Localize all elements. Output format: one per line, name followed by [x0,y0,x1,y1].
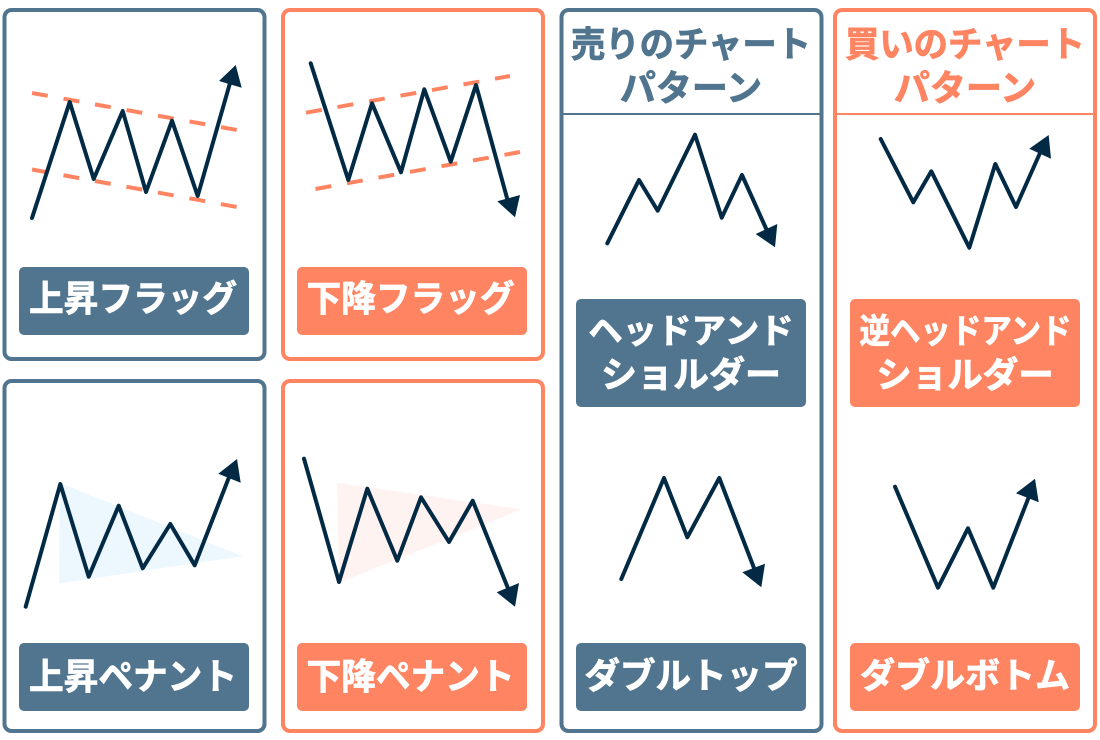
chart line: double bottom [895,479,1039,588]
label: double bottom [850,643,1080,711]
label: double bottom: ダブルボトム [860,656,1070,696]
heading: sell patterns: 売りのチャート [571,24,811,64]
label: falling pennant [297,643,527,711]
heading: buy patterns: パターン [894,68,1036,108]
pennant triangle [337,483,522,583]
label: rising pennant: 上昇ペナント [29,656,237,697]
label: head and shoulders: ショルダー [601,354,781,395]
label: head and shoulders [576,299,806,407]
label: falling pennant: 下降ペナント [306,656,514,697]
heading: sell patterns: パターン [620,68,762,108]
panel: rising pennant [4,381,264,731]
heading: buy patterns [845,24,1085,108]
panel: falling pennant [283,381,543,731]
label: inverse head and shoulders: 逆ヘッドアンド [860,313,1072,351]
flag channel lines [306,76,520,189]
label: double top: ダブルトップ [584,656,798,696]
chart line: rising pennant [26,459,241,607]
chart line: rising flag [32,65,242,218]
label: double top [576,643,806,711]
chart line: falling pennant [304,459,519,607]
panel: falling flag [283,10,543,359]
pennant triangle [59,483,243,583]
label: rising flag: 上昇フラッグ [29,278,237,319]
label: falling flag [297,267,527,335]
heading: buy patterns: 買いのチャート [845,24,1085,64]
label: rising flag [19,267,249,335]
flag channel lines [32,93,237,207]
label: inverse head and shoulders [850,299,1080,407]
panel: buy chart patterns [835,10,1095,731]
panel: rising flag [4,10,264,359]
label: head and shoulders: ヘッドアンド [588,313,794,351]
chart line: inverse head and shoulders [881,135,1051,248]
chart line: falling flag [311,63,520,217]
label: falling flag: 下降フラッグ [306,278,514,319]
panel: sell chart patterns [562,10,822,731]
label: rising pennant [19,643,249,711]
heading: sell patterns [571,24,811,108]
label: inverse head and shoulders: ショルダー [876,355,1054,395]
chart line: head and shoulders [607,135,777,247]
chart line: double top [621,478,765,587]
